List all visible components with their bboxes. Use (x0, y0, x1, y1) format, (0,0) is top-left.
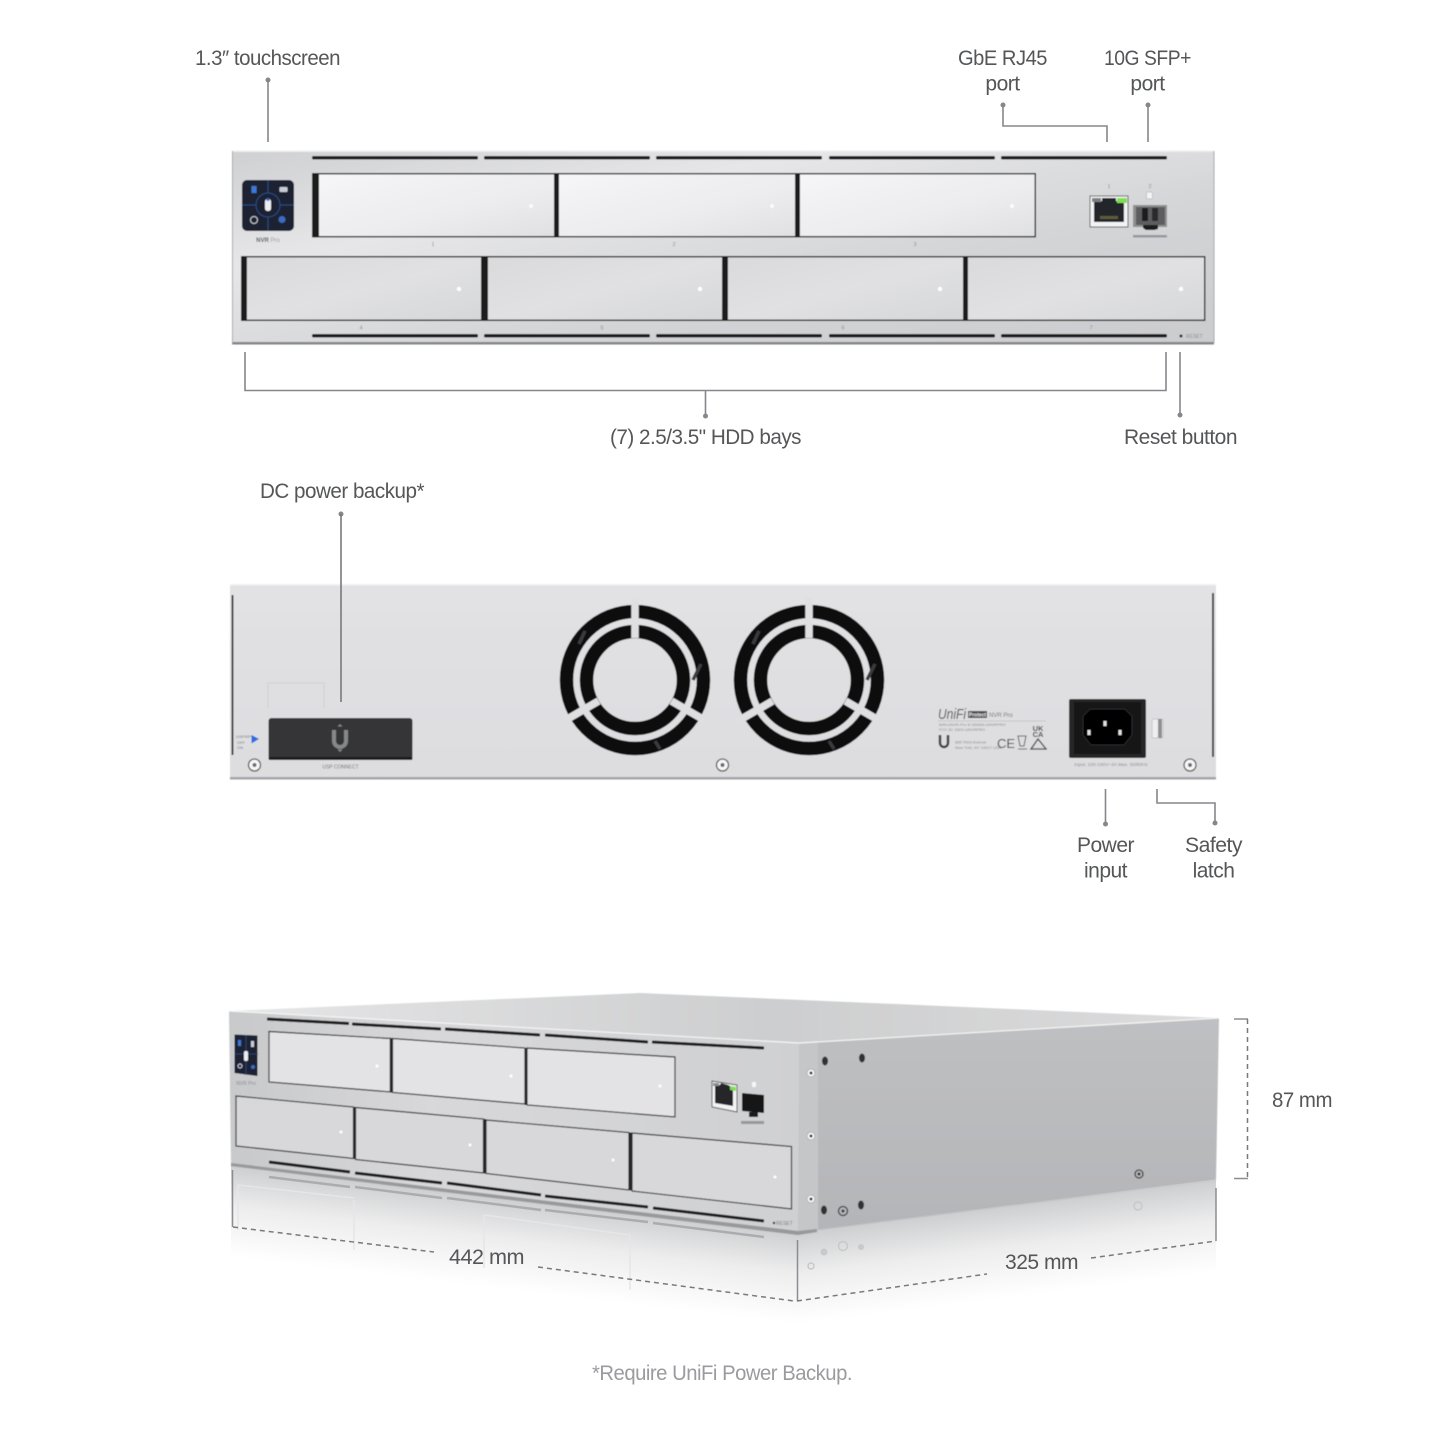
safety latch (1152, 719, 1163, 738)
3D bay dividers (354, 1038, 630, 1190)
USP connector module (268, 718, 412, 770)
icon: SFP+ port (1133, 184, 1167, 238)
drive bays bottom row: 6 (841, 326, 845, 332)
regulatory label: Protect (969, 712, 986, 718)
front vents (312, 156, 1167, 338)
callout: HDD bays bracket (245, 352, 1166, 449)
icon: power inlet: Input: 100-240V~3A Max. 50/60Hz (1074, 762, 1148, 768)
label: 10G SFP+ port (1104, 47, 1191, 142)
faint sticker outline (268, 683, 324, 708)
callout: power input: Power (1077, 834, 1134, 857)
regulatory label: M/N:UNVR-Pro IC:6545A-UNVRPRO (939, 722, 1005, 727)
regulatory label: UK (1033, 724, 1044, 733)
USP status legend: OFF (237, 740, 246, 745)
dimension: 87 mm (1234, 1019, 1332, 1178)
3D touchscreen (234, 1034, 258, 1087)
3D SFP port (741, 1082, 764, 1124)
dimension: 87 mm: 87 mm (1272, 1089, 1332, 1112)
drive bays bottom row: 7 (1089, 326, 1093, 332)
icon: right fan grille (738, 598, 880, 749)
drive bays top row: 3 (913, 242, 917, 248)
3D bays bottom row (236, 1096, 792, 1209)
regulatory label: UniFi (938, 706, 967, 723)
front face (229, 1011, 799, 1232)
drive bays bottom row (241, 256, 1206, 332)
footnote: *Require UniFi Power Backup. (592, 1362, 852, 1385)
regulatory label: New York, NY 10017 USA (955, 745, 1002, 750)
drive bays bottom row: 5 (600, 326, 604, 332)
label: 10G SFP+ port: port (1130, 72, 1165, 96)
label: 1.3 inch touchscreen (195, 47, 340, 142)
dimension: 325 mm (797, 1188, 1216, 1301)
label: GbE RJ45 port (958, 47, 1107, 142)
label: 10G SFP+ port: 10G SFP+ (1104, 47, 1191, 70)
callout: HDD bays bracket: (7) 2.5/3.5" HDD bays (610, 426, 801, 449)
3D RJ45 port (712, 1081, 737, 1112)
panel: front view of device (232, 150, 1214, 344)
regulatory label (938, 706, 1046, 751)
label: 1.3 inch touchscreen: 1.3″ touchscreen (195, 47, 340, 70)
icon: touchscreen (242, 180, 294, 244)
icon: touchscreen: NVR Pro (256, 238, 280, 244)
dimension: 442 mm: 442 mm (449, 1246, 524, 1269)
icon: RJ45 port (1090, 184, 1128, 227)
callout: power input: input (1084, 860, 1128, 882)
USP connector module: USP CONNECT (322, 764, 359, 770)
3D bays top row (269, 1032, 675, 1117)
front corner strip (798, 1042, 818, 1232)
drive bays top row (312, 173, 1036, 248)
icon: power inlet (1069, 699, 1148, 768)
label: GbE RJ45 port: GbE RJ45 (958, 47, 1047, 70)
drive bays bottom row: 4 (359, 326, 363, 332)
panel: 3D device: RESET (776, 1221, 793, 1227)
panel: 3D device (229, 993, 1219, 1235)
callout: DC power backup (260, 480, 424, 702)
USP status legend: ON (237, 745, 243, 750)
dimension: 325 mm: 325 mm (1005, 1251, 1078, 1274)
dimension: 442 mm (232, 1170, 794, 1301)
icon: SFP+ port: 2 (1148, 184, 1152, 190)
callout: safety latch: Safety (1185, 834, 1243, 857)
drive bays top row: 2 (672, 242, 676, 248)
callout: DC power backup: DC power backup* (260, 480, 424, 503)
icon: left fan grille (564, 598, 706, 749)
callout: safety latch (1157, 789, 1243, 882)
reflection under 3D device (231, 1165, 1216, 1324)
3D touchscreen: NVR Pro (236, 1081, 256, 1087)
regulatory label: FCC ID: SWX-UNVRPRO (939, 727, 985, 732)
USP status legend (236, 734, 259, 750)
callout: safety latch: latch (1193, 860, 1234, 882)
reset pinhole: RESET (1186, 334, 1203, 340)
icon: RJ45 port: 1 (1107, 184, 1111, 190)
regulatory label: CA (1033, 730, 1044, 739)
callout: reset button (1124, 352, 1237, 449)
side face (818, 1018, 1219, 1230)
3D vents (267, 1019, 764, 1221)
callout: reset button: Reset button (1124, 426, 1237, 449)
panel: rear view of device (230, 584, 1216, 780)
USP status legend: USP/RPS (236, 734, 254, 739)
top face (229, 993, 1219, 1043)
drive bays top row: 1 (431, 242, 435, 248)
label: GbE RJ45 port: port (985, 72, 1020, 96)
callout: power input (1077, 789, 1134, 882)
screws (248, 759, 1196, 771)
regulatory label: CE (997, 736, 1015, 751)
regulatory label: 685 Third Avenue (955, 740, 987, 744)
regulatory label: NVR Pro (989, 713, 1013, 719)
side screws (807, 1069, 815, 1203)
